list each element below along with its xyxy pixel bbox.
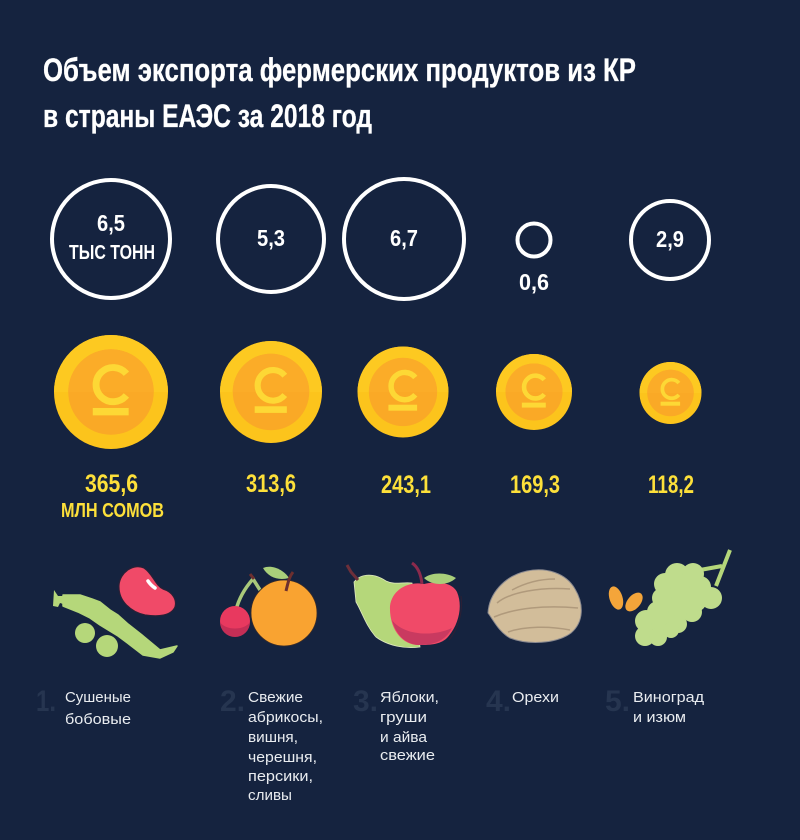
coin: 365,6 xyxy=(54,335,168,449)
item 5 label: Виноград xyxy=(633,689,704,706)
item 4 label: 4. xyxy=(486,685,511,718)
item 1 label xyxy=(36,685,131,728)
coin values xyxy=(61,470,694,522)
icon: beans xyxy=(53,567,177,658)
item 5 label: и изюм xyxy=(633,709,686,726)
item 2 label: вишня, xyxy=(248,729,298,746)
coin values: 169,3 xyxy=(510,471,560,499)
item 2 label: персики, xyxy=(248,768,313,785)
item 1 label: Сушеные xyxy=(65,689,131,706)
circle: 0,6 xyxy=(518,224,550,295)
item 5 label xyxy=(605,685,704,726)
circle: 5,3 xyxy=(218,186,324,292)
item 3 label: 3. xyxy=(353,685,378,718)
circle: 0,6: 0,6 xyxy=(519,269,549,295)
item 5 label: 5. xyxy=(605,685,630,718)
item 1 label: 1. xyxy=(36,685,56,718)
coin: 169,3 xyxy=(496,354,572,430)
item 2 label: абрикосы, xyxy=(248,709,323,726)
item 1 label: бобовые xyxy=(65,711,131,728)
circle: 6,7 xyxy=(344,179,464,299)
coin: 243,1 xyxy=(358,346,448,438)
coin values: 313,6 xyxy=(246,470,296,498)
item 2 label xyxy=(220,685,323,804)
coin values: 118,2 xyxy=(648,471,694,499)
title: Объем экспорта фермерских продуктов из КР xyxy=(43,52,636,88)
title: в страны ЕАЭС за 2018 год xyxy=(43,98,372,134)
circle: 5,3: 5,3 xyxy=(257,225,285,251)
tonnage circles row xyxy=(52,179,709,299)
icon: grapes and raisins xyxy=(606,550,730,646)
circle: 2,9 xyxy=(631,201,709,279)
circle: 6,5 thousand tons: 6,5 xyxy=(97,210,125,236)
coin: 313,6 xyxy=(220,341,322,443)
item 3 label: свежие xyxy=(380,747,435,764)
coins row xyxy=(54,335,702,449)
coin values: 243,1 xyxy=(381,471,431,499)
item 2 label: сливы xyxy=(248,787,292,804)
item 2 label: 2. xyxy=(220,685,245,718)
icon: pear and apple xyxy=(347,563,462,648)
coin values: 365,6 xyxy=(85,470,138,498)
circle: 2,9: 2,9 xyxy=(656,226,684,252)
item 3 label: и айва xyxy=(380,729,428,746)
item 2 label: черешня, xyxy=(248,749,317,766)
coin: 118,2 xyxy=(640,362,702,424)
coin values: МЛН СОМОВ xyxy=(61,500,164,522)
item 4 label: Орехи xyxy=(512,689,559,706)
item 3 label xyxy=(353,685,439,764)
item 3 label: груши xyxy=(380,709,427,726)
icon: walnut xyxy=(488,570,581,642)
circle: 6,7: 6,7 xyxy=(390,225,418,251)
title xyxy=(43,52,636,134)
circle: 6,5 thousand tons xyxy=(52,180,170,298)
circle: 6,5 thousand tons: ТЫС ТОНН xyxy=(69,242,155,264)
item 2 label: Свежие xyxy=(248,689,303,706)
item 3 label: Яблоки, xyxy=(380,689,439,706)
item 4 label xyxy=(486,685,559,718)
icon: cherry and apricot xyxy=(220,567,317,646)
